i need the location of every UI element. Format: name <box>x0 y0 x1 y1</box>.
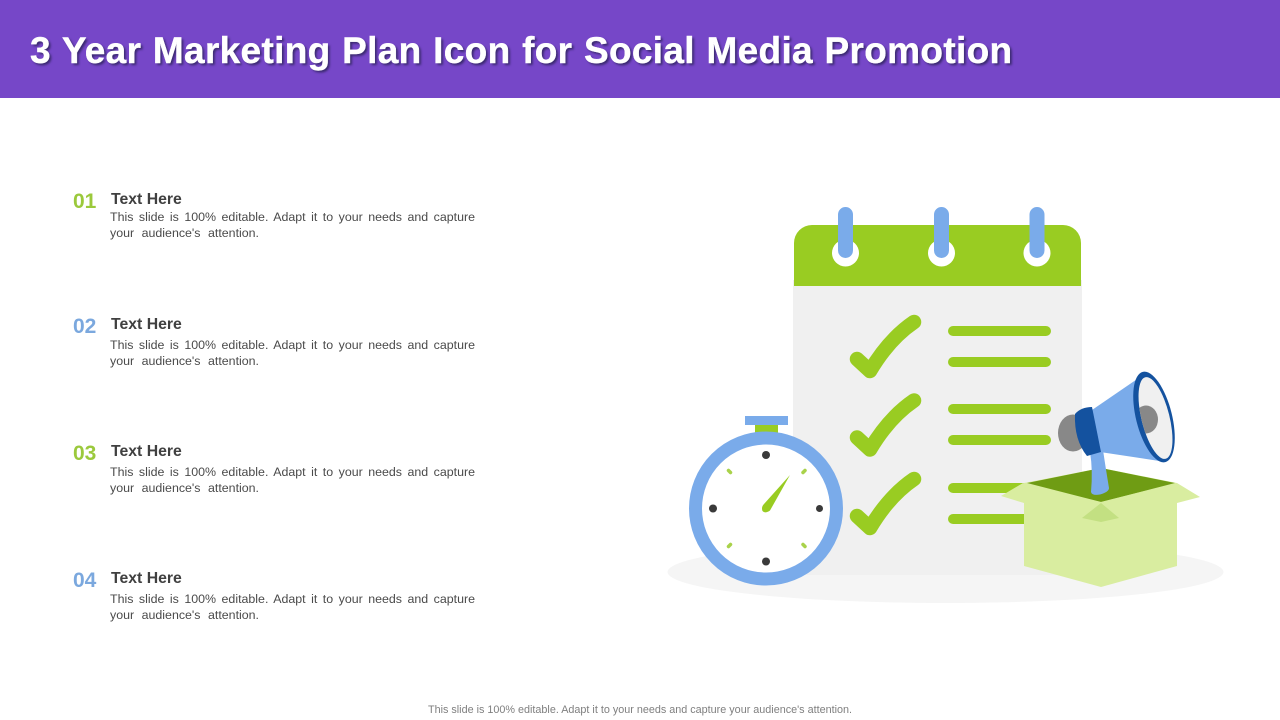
icon: stopwatch <box>696 416 836 579</box>
list item 03 <box>73 442 475 495</box>
item heading 01: Text Here <box>111 191 182 208</box>
item description 04 <box>110 592 475 622</box>
header banner <box>0 0 1280 98</box>
item description 01 <box>110 210 475 240</box>
calendar page <box>793 280 1082 575</box>
item heading 03: Text Here <box>111 443 182 460</box>
calendar rings <box>832 214 1050 266</box>
item heading 02: Text Here <box>111 316 182 333</box>
title: 3 Year Marketing Plan Icon for Social Media Promotion <box>30 30 1012 71</box>
item description 02: This slide is 100% editable. Adapt it to your needs and capture <box>110 338 475 352</box>
number 02: 02 <box>73 315 96 338</box>
item description 03: your audience's attention. <box>110 481 259 495</box>
item description 03: This slide is 100% editable. Adapt it to your needs and capture <box>110 465 475 479</box>
number 01: 01 <box>73 190 96 213</box>
number 04: 04 <box>73 569 96 592</box>
item description 01: This slide is 100% editable. Adapt it to your needs and capture <box>110 210 475 224</box>
item description 04: This slide is 100% editable. Adapt it to your needs and capture <box>110 592 475 606</box>
list item 04 <box>73 569 475 622</box>
item description 02 <box>110 338 475 368</box>
checklist lines <box>953 331 1046 519</box>
icon: megaphone <box>1058 368 1183 495</box>
list item 02 <box>73 315 475 368</box>
illustration <box>668 207 1224 603</box>
check marks <box>857 322 914 528</box>
ground shadow <box>668 541 1224 603</box>
item description 04: your audience's attention. <box>110 608 259 622</box>
item description 01: your audience's attention. <box>110 226 259 240</box>
calendar header <box>794 225 1081 286</box>
item description 02: your audience's attention. <box>110 354 259 368</box>
item description 03 <box>110 465 475 495</box>
number 03: 03 <box>73 442 96 465</box>
item heading 04: Text Here <box>111 570 182 587</box>
footer note: This slide is 100% editable. Adapt it to your needs and capture your audience's attention. <box>428 704 852 716</box>
list item 01 <box>73 190 475 240</box>
icon: open box <box>1001 468 1200 587</box>
icon: calendar checklist <box>793 214 1082 575</box>
